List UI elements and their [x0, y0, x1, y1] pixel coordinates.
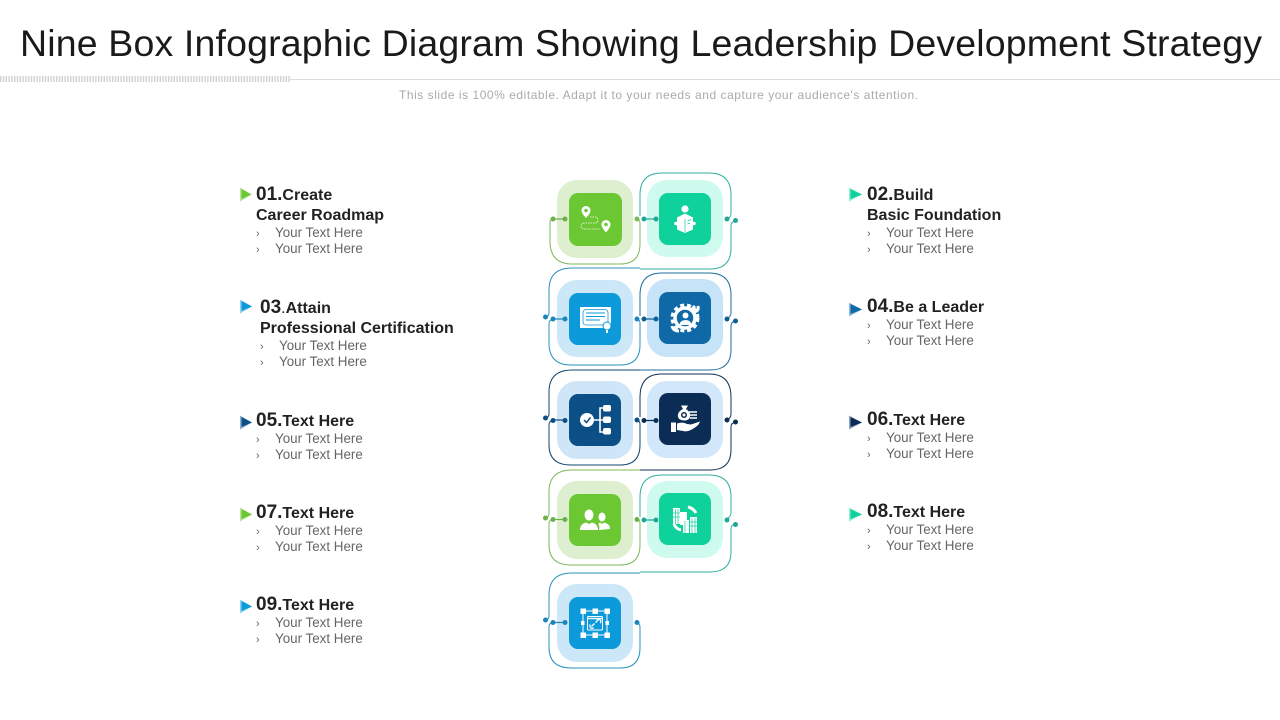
text block: 06 Text Here: 06.Text Here: [867, 409, 965, 430]
icon: certificate: [580, 307, 611, 333]
arrow icon 07: [240, 508, 252, 522]
text block: 08 Text Here: ›: [867, 525, 871, 537]
text block: 03 Attain Professional Certification: Your Text Here: [279, 354, 367, 369]
icon: gear with wrench and person: [672, 305, 698, 331]
box 3: professional certification: [543, 268, 640, 365]
text block: 02 Build Basic Foundation: ›: [867, 244, 871, 256]
text block: 08 Text Here: Your Text Here: [886, 538, 974, 553]
arrow icon 02: [849, 188, 862, 202]
text block: 04 Be a Leader: Your Text Here: [886, 333, 974, 348]
text block: 07 Text Here: Your Text Here: [275, 523, 363, 538]
text block: 07 Text Here: 07.Text Here: [256, 502, 354, 523]
text block: 05 Text Here: ›: [256, 434, 260, 446]
text block: 05 Text Here: Your Text Here: [275, 447, 363, 462]
text block: 06 Text Here: Your Text Here: [886, 446, 974, 461]
icon: buildings with arrows: [673, 507, 697, 533]
text block: 09 Text Here: 09.Text Here: [256, 594, 354, 615]
box 5: decision tree: [543, 370, 640, 465]
arrow icon 01: [240, 188, 252, 202]
text block: 06 Text Here: [849, 409, 974, 461]
nine box diagram: [543, 173, 738, 668]
box 2: basic foundation: [640, 173, 738, 269]
arrow icon 03: [240, 300, 252, 314]
text block: 03 Attain Professional Certification: Your Text Here: [279, 338, 367, 353]
text block: 05 Text Here: ›: [256, 450, 260, 462]
text block: 01 Create Career Roadmap: ›: [256, 228, 260, 240]
text block: 02 Build Basic Foundation: 02.Build: [867, 184, 933, 205]
text block: 09 Text Here: ›: [256, 634, 260, 646]
arrow icon 08: [849, 508, 862, 522]
icon: two people: [580, 510, 610, 530]
text block: 01 Create Career Roadmap: Your Text Here: [275, 225, 363, 240]
icon: link in selection frame: [580, 608, 610, 638]
subtitle: This slide is 100% editable. Adapt it to your needs and capture your audience's attention.: [399, 88, 918, 102]
text block: 07 Text Here: [240, 502, 363, 554]
text block: 06 Text Here: ›: [867, 449, 871, 461]
arrow icon 05: [240, 416, 252, 430]
text block: 02 Build Basic Foundation: [849, 184, 1001, 256]
text block: 01 Create Career Roadmap: 01.Create: [256, 184, 332, 205]
text block: 06 Text Here: ›: [867, 433, 871, 445]
text block: 08 Text Here: Your Text Here: [886, 522, 974, 537]
text block: 04 Be a Leader: Your Text Here: [886, 317, 974, 332]
text block: 01 Create Career Roadmap: ›: [256, 244, 260, 256]
text block: 07 Text Here: ›: [256, 542, 260, 554]
text block: 05 Text Here: 05.Text Here: [256, 410, 354, 431]
text block: 04 Be a Leader: 04.Be a Leader: [867, 296, 984, 317]
box 7: people: [543, 470, 640, 565]
text block: 09 Text Here: [240, 594, 363, 646]
arrow icon 09: [240, 600, 252, 614]
box 4: be a leader: [640, 273, 738, 370]
text block: 04 Be a Leader: [849, 296, 984, 348]
text block: 02 Build Basic Foundation: Your Text Here: [886, 241, 974, 256]
text block: 02 Build Basic Foundation: Your Text Here: [886, 225, 974, 240]
text block: 03 Attain Professional Certification: ›: [260, 357, 264, 369]
text block: 02 Build Basic Foundation: ›: [867, 228, 871, 240]
text block: 03 Attain Professional Certification: 03.Attain: [260, 297, 331, 318]
icon: map route pins: [581, 206, 610, 232]
arrow icon 06: [849, 416, 862, 430]
icon: hand holding money bag: [671, 406, 700, 432]
text block: 04 Be a Leader: ›: [867, 320, 871, 332]
text block: 03 Attain Professional Certification: Professional Certification: [260, 320, 454, 337]
text block: 06 Text Here: Your Text Here: [886, 430, 974, 445]
text block: 01 Create Career Roadmap: Career Roadmap: [256, 207, 384, 224]
text block: 07 Text Here: Your Text Here: [275, 539, 363, 554]
box 9: linked design: [543, 573, 640, 668]
box 1: career roadmap: [550, 180, 640, 264]
text block: 02 Build Basic Foundation: Basic Foundation: [867, 207, 1001, 224]
text block: 05 Text Here: Your Text Here: [275, 431, 363, 446]
text block: 09 Text Here: ›: [256, 618, 260, 630]
box 6: money in hand: [640, 374, 738, 470]
icon: person with open book: [674, 205, 696, 233]
text block: 07 Text Here: ›: [256, 526, 260, 538]
text block: 08 Text Here: ›: [867, 541, 871, 553]
text block: 03 Attain Professional Certification: ›: [260, 341, 264, 353]
text block: 04 Be a Leader: ›: [867, 336, 871, 348]
text block: 09 Text Here: Your Text Here: [275, 631, 363, 646]
arrow icon 04: [849, 302, 862, 316]
text block: 08 Text Here: 08.Text Here: [867, 501, 965, 522]
text block: 01 Create Career Roadmap: Your Text Here: [275, 241, 363, 256]
title: Nine Box Infographic Diagram Showing Leadership Development Strategy: [20, 22, 1262, 64]
icon: check with branches: [580, 405, 611, 434]
text block: 08 Text Here: [849, 501, 974, 553]
text block: 09 Text Here: Your Text Here: [275, 615, 363, 630]
text block: 03 Attain Professional Certification: [240, 297, 454, 369]
box 8: buildings: [640, 475, 738, 572]
text block: 01 Create Career Roadmap: [240, 184, 384, 256]
text block: 05 Text Here: [240, 410, 363, 462]
